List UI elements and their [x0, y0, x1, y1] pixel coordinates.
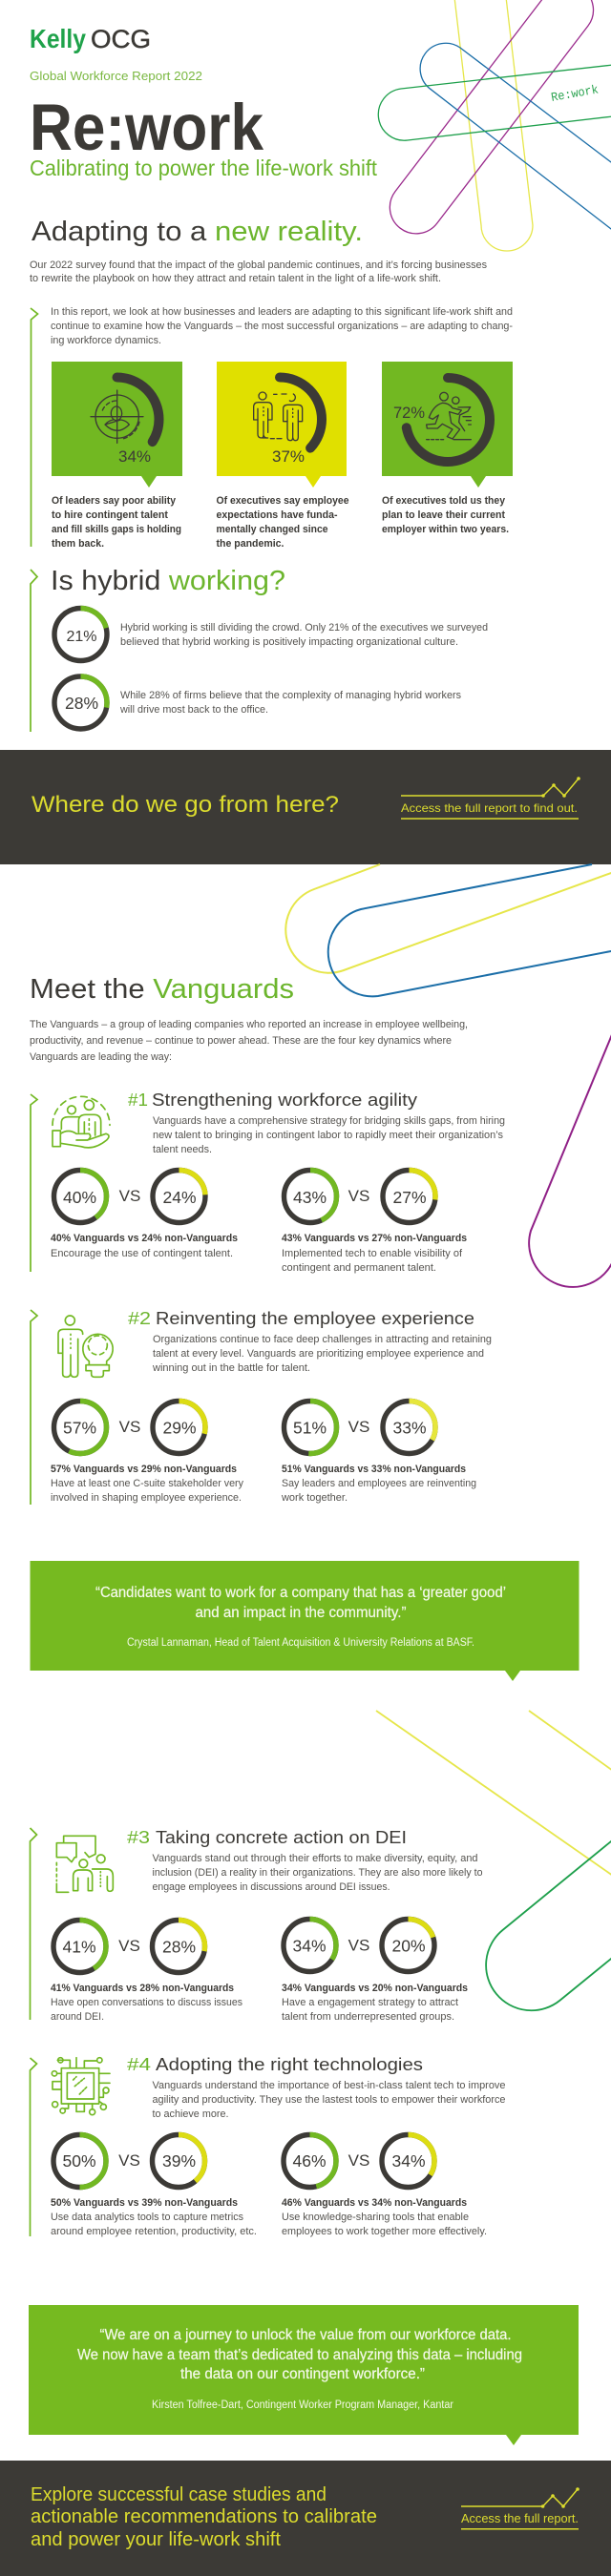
- callout: BASF quote: [31, 1561, 579, 1681]
- stat text: 51 vs 33: 51% Vanguards vs 33% non-Vanguards: [282, 1464, 466, 1475]
- cta band: explore case studies: Access the full report.: [461, 2512, 579, 2525]
- callout: BASF quote: “Candidates want to work for a company that has a ‘greater good’: [95, 1585, 506, 1601]
- paragraph: #3: [153, 1853, 483, 1893]
- stat text: 50 vs 39: 50% Vanguards vs 39% non-Vanguards: [51, 2197, 238, 2209]
- paragraph: #4: to achieve more.: [153, 2109, 229, 2120]
- cta band: explore case studies: Explore successful case studies and: [31, 2483, 327, 2505]
- second paragraph: [51, 306, 513, 346]
- callout: Kantar quote: Kirsten Tolfree-Dart, Contingent Worker Program Manager, Kantar: [152, 2399, 453, 2411]
- heading: adapting to a new reality: Adapting to a new reality.: [32, 217, 363, 247]
- paragraph: #1: talent needs.: [153, 1144, 212, 1155]
- stat text: 34 vs 20: 34% Vanguards vs 20% non-Vanguards: [282, 1983, 468, 1994]
- icon: running people: [427, 392, 471, 440]
- cta band: where do we go from here: Access the full report to find out.: [401, 801, 578, 815]
- decorative loops: header: [378, 0, 611, 251]
- stat text: 51 vs 33: [281, 1464, 476, 1504]
- paragraph: #3: engage employees in discussions around DEI issues.: [153, 1881, 390, 1893]
- heading: #3: Taking concrete action on DEI: [156, 1828, 407, 1847]
- text: hybrid 28%: will drive most back to the office.: [119, 704, 268, 716]
- section rail: #1: [31, 1094, 37, 1272]
- logo: [30, 24, 151, 53]
- paragraph: #4: agility and productivity. They use the lastest tools to empower their workforce: [153, 2094, 506, 2106]
- ring: 21%: 21%: [66, 629, 97, 645]
- stat text: 34 vs 20: [282, 1983, 468, 2023]
- stat text: 50 vs 39: around employee retention, productivity, etc.: [51, 2226, 257, 2237]
- stat pair: 57 vs 29: VS: [119, 1418, 140, 1436]
- stat pair: 40 vs 24: [53, 1170, 205, 1223]
- panel: 72% executives: 72%: [393, 404, 425, 422]
- decorative loops: header: Re:work: [550, 82, 600, 105]
- heading: meet the vanguards: Meet the Vanguards: [30, 974, 294, 1005]
- ring: 28%: [54, 676, 107, 729]
- callout: Kantar quote: [29, 2305, 579, 2445]
- stat text: 46 vs 34: 46% Vanguards vs 34% non-Vanguards: [282, 2197, 467, 2209]
- stat pair: 41 vs 28: VS: [118, 1937, 140, 1955]
- title: Re:work: [30, 91, 264, 164]
- section rail: #4: [31, 2058, 36, 2236]
- icon: target on person: [91, 390, 143, 443]
- stat text: 41 vs 28: [51, 1983, 242, 2023]
- logo: OCG: [91, 25, 151, 53]
- caption: 72%: [382, 495, 509, 535]
- stat text: 57 vs 29: [51, 1464, 243, 1504]
- stat pair: 34 vs 20: 20%: [391, 1937, 426, 1956]
- stat text: 43 vs 27: [282, 1233, 467, 1274]
- text: hybrid 28%: [119, 690, 461, 716]
- paragraph: #1: new talent to bringing in contingent labor to rapidly meet their organization’s: [153, 1130, 503, 1141]
- caption: 34%: them back.: [52, 538, 104, 550]
- second paragraph: In this report, we look at how businesses and leaders are adapting to this significant life-work shift and: [51, 306, 513, 318]
- second paragraph: ing workforce dynamics.: [51, 335, 161, 346]
- stat text: 51 vs 33: Say leaders and employees are reinventing: [282, 1478, 476, 1489]
- caption: 34%: and fill skills gaps is holding: [52, 524, 181, 535]
- vanguards intro paragraph: productivity, and revenue – continue to power ahead. These are the four key dynamics where: [30, 1035, 452, 1047]
- heading: #2: #2: [128, 1309, 151, 1328]
- paragraph: #1: [153, 1115, 505, 1155]
- decorative loops: vanguards: [285, 864, 611, 1287]
- stat text: 57 vs 29: Have at least one C-suite stakeholder very: [51, 1478, 243, 1489]
- caption: 37%: the pandemic.: [216, 538, 284, 550]
- paragraph: #2: [152, 1334, 492, 1374]
- stat pair: 51 vs 33: [284, 1401, 435, 1454]
- stat text: 41 vs 28: 41% Vanguards vs 28% non-Vanguards: [51, 1983, 234, 1994]
- heading: #3: #3: [127, 1828, 150, 1847]
- stat text: 41 vs 28: Have open conversations to discuss issues: [51, 1997, 242, 2008]
- intro paragraph: to rewrite the playbook on how they attract and retain talent in the light of a life-work shift.: [30, 273, 441, 284]
- subtitle: Calibrating to power the life-work shift: [30, 156, 378, 180]
- paragraph: #2: Organizations continue to face deep challenges in attracting and retaining: [153, 1334, 492, 1345]
- caption: 37%: expectations have funda-: [216, 509, 338, 521]
- stat pair: 50 vs 39: VS: [118, 2151, 140, 2170]
- paragraph: #2: winning out in the battle for talent.: [152, 1362, 310, 1374]
- section rail: report overview: [31, 308, 38, 547]
- second paragraph: continue to examine how the Vanguards – the most successful organizations – are adapting to chang-: [51, 321, 513, 332]
- stat text: 57 vs 29: involved in shaping employee experience.: [51, 1492, 242, 1504]
- heading: #1: #1: [128, 1091, 148, 1110]
- stat text: 50 vs 39: Use data analytics tools to capture metrics: [51, 2212, 243, 2223]
- stat pair: 51 vs 33: 33%: [392, 1418, 427, 1437]
- heading: #2: Reinventing the employee experience: [156, 1309, 474, 1328]
- caption: 72%: employer within two years.: [382, 524, 509, 535]
- stat text: 43 vs 27: contingent and permanent talent.: [282, 1262, 436, 1274]
- icon: trend line small: [461, 2487, 579, 2508]
- stat text: 40 vs 24: 40% Vanguards vs 24% non-Vanguards: [51, 1233, 238, 1244]
- stat pair: 46 vs 34: 46%: [292, 2151, 327, 2171]
- caption: 37%: mentally changed since: [216, 524, 328, 535]
- stat text: 50 vs 39: [51, 2197, 257, 2237]
- panel: 34% leaders: [52, 362, 182, 488]
- stat pair: 50 vs 39: 50%: [62, 2151, 96, 2171]
- text: hybrid 21%: [120, 622, 488, 648]
- stat pair: 50 vs 39: [53, 2135, 204, 2187]
- vanguards intro paragraph: [30, 1019, 468, 1063]
- callout: BASF quote: and an impact in the community.”: [195, 1605, 407, 1621]
- stat pair: 57 vs 29: 29%: [162, 1418, 197, 1437]
- decorative loops: lower: [376, 1711, 611, 2010]
- paragraph: #3: Vanguards stand out through their efforts to make diversity, equity, and: [153, 1853, 477, 1864]
- ring: 28%: 28%: [65, 694, 98, 713]
- stat text: 46 vs 34: employees to work together more effectively.: [282, 2226, 487, 2237]
- stat text: 40 vs 24: [51, 1233, 238, 1259]
- heading: #4: #4: [127, 2055, 151, 2074]
- section rail: #3: [31, 1828, 36, 2020]
- stat text: 46 vs 34: Use knowledge-sharing tools that enable: [282, 2212, 469, 2223]
- caption: 34%: to hire contingent talent: [52, 509, 168, 521]
- text: hybrid 28%: While 28% of firms believe that the complexity of managing hybrid workers: [120, 690, 461, 701]
- stat pair: 43 vs 27: 43%: [293, 1188, 327, 1207]
- report label: Global Workforce Report 2022: [30, 69, 202, 83]
- stat pair: 46 vs 34: 34%: [391, 2151, 426, 2171]
- heading: #4: Adopting the right technologies: [156, 2055, 423, 2074]
- stat pair: 41 vs 28: 41%: [62, 1937, 96, 1956]
- cta band: where do we go from here: Where do we go from here?: [32, 792, 339, 818]
- callout: Kantar quote: We now have a team that’s dedicated to analyzing this data – including: [77, 2347, 522, 2363]
- stat text: 40 vs 24: Encourage the use of contingent talent.: [51, 1248, 233, 1259]
- cta band: where do we go from here: [0, 750, 611, 864]
- stat pair: 34 vs 20: VS: [348, 1937, 369, 1954]
- stat pair: 34 vs 20: 34%: [292, 1937, 327, 1956]
- stat text: 46 vs 34: [282, 2197, 487, 2237]
- caption: 37%: [216, 495, 349, 550]
- icon: trend line: [401, 777, 580, 798]
- caption: 34%: Of leaders say poor ability: [52, 495, 177, 507]
- paragraph: #3: inclusion (DEI) a reality in their organizations. They are also more likely to: [153, 1867, 483, 1879]
- ring: 21%: [54, 609, 107, 660]
- panel: 72% executives: [382, 362, 513, 488]
- paragraph: #1: Vanguards have a comprehensive strategy for bridging skills gaps, from hiring: [153, 1115, 505, 1127]
- stat pair: 46 vs 34: VS: [348, 2151, 369, 2170]
- icon: person with lightbulb: [58, 1316, 113, 1377]
- stat pair: 41 vs 28: [53, 1920, 204, 1973]
- panel: 37% executives: 37%: [272, 447, 305, 466]
- cta band: explore case studies: [0, 2461, 611, 2576]
- stat pair: 51 vs 33: 51%: [293, 1418, 327, 1437]
- section rail: hybrid: [31, 570, 37, 732]
- callout: BASF quote: Crystal Lannaman, Head of Talent Acquisition & University Relations at BASF.: [127, 1637, 474, 1649]
- stat pair: 43 vs 27: [284, 1170, 435, 1223]
- stat pair: 40 vs 24: 40%: [63, 1188, 96, 1207]
- caption: 34%: [52, 495, 181, 550]
- stat pair: 57 vs 29: 57%: [63, 1418, 96, 1437]
- stat text: 51 vs 33: work together.: [281, 1492, 348, 1504]
- intro paragraph: Our 2022 survey found that the impact of the global pandemic continues, and it’s forcing businesses: [30, 260, 487, 271]
- stat pair: 57 vs 29: [53, 1401, 205, 1454]
- stat text: 43 vs 27: 43% Vanguards vs 27% non-Vanguards: [282, 1233, 467, 1244]
- callout: Kantar quote: “We are on a journey to unlock the value from our workforce data.: [99, 2327, 512, 2343]
- stat text: 57 vs 29: 57% Vanguards vs 29% non-Vanguards: [51, 1464, 237, 1475]
- heading: is hybrid working: Is hybrid working?: [51, 566, 285, 596]
- icon: microchip: [52, 2058, 110, 2115]
- caption: 72%: plan to leave their current: [382, 509, 505, 521]
- text: hybrid 21%: believed that hybrid working is positively impacting organizational culture.: [120, 636, 458, 648]
- cta band: explore case studies: and power your life-work shift: [31, 2528, 281, 2550]
- callout: Kantar quote: the data on our contingent workforce.”: [180, 2366, 425, 2382]
- stat pair: 40 vs 24: 24%: [162, 1188, 197, 1207]
- stat text: 34 vs 20: Have a engagement strategy to attract: [282, 1997, 458, 2008]
- panel: 37% executives: [217, 362, 347, 488]
- cta band: explore case studies: actionable recommendations to calibrate: [31, 2505, 377, 2527]
- stat text: 43 vs 27: Implemented tech to enable visibility of: [282, 1248, 463, 1259]
- stat pair: 51 vs 33: VS: [348, 1418, 369, 1436]
- section rail: #2: [31, 1310, 37, 1505]
- paragraph: #4: Vanguards understand the importance of best-in-class talent tech to improve: [153, 2080, 506, 2091]
- paragraph: #4: [153, 2080, 506, 2120]
- stat text: 41 vs 28: around DEI.: [51, 2011, 104, 2023]
- vanguards intro paragraph: The Vanguards – a group of leading companies who reported an increase in employee wellbeing,: [30, 1019, 468, 1030]
- panel: 34% leaders: 34%: [118, 447, 151, 466]
- caption: 72%: Of executives told us they: [382, 495, 506, 507]
- paragraph: #2: talent at every level. Vanguards are prioritizing employee experience and: [153, 1348, 484, 1360]
- stat text: 34 vs 20: talent from underrepresented groups.: [282, 2011, 454, 2023]
- logo: Kelly: [30, 24, 86, 53]
- stat pair: 43 vs 27: 27%: [392, 1188, 427, 1207]
- stat pair: 50 vs 39: 39%: [162, 2151, 196, 2171]
- stat pair: 43 vs 27: VS: [348, 1187, 369, 1205]
- caption: 37%: Of executives say employee: [216, 495, 349, 507]
- stat pair: 41 vs 28: 28%: [162, 1937, 196, 1956]
- stat pair: 34 vs 20: [284, 1920, 434, 1971]
- vanguards intro paragraph: Vanguards are leading the way:: [30, 1051, 172, 1063]
- heading: #1: Strengthening workforce agility: [152, 1091, 417, 1110]
- stat pair: 46 vs 34: [284, 2135, 434, 2187]
- text: hybrid 21%: Hybrid working is still dividing the crowd. Only 21% of the executives we surveyed: [120, 622, 488, 634]
- stat pair: 40 vs 24: VS: [119, 1187, 140, 1205]
- intro paragraph: [30, 260, 487, 284]
- icon: people in conversation: [56, 1836, 113, 1892]
- icon: hand holding people: [53, 1096, 110, 1148]
- icon: two people swapping: [254, 392, 303, 441]
